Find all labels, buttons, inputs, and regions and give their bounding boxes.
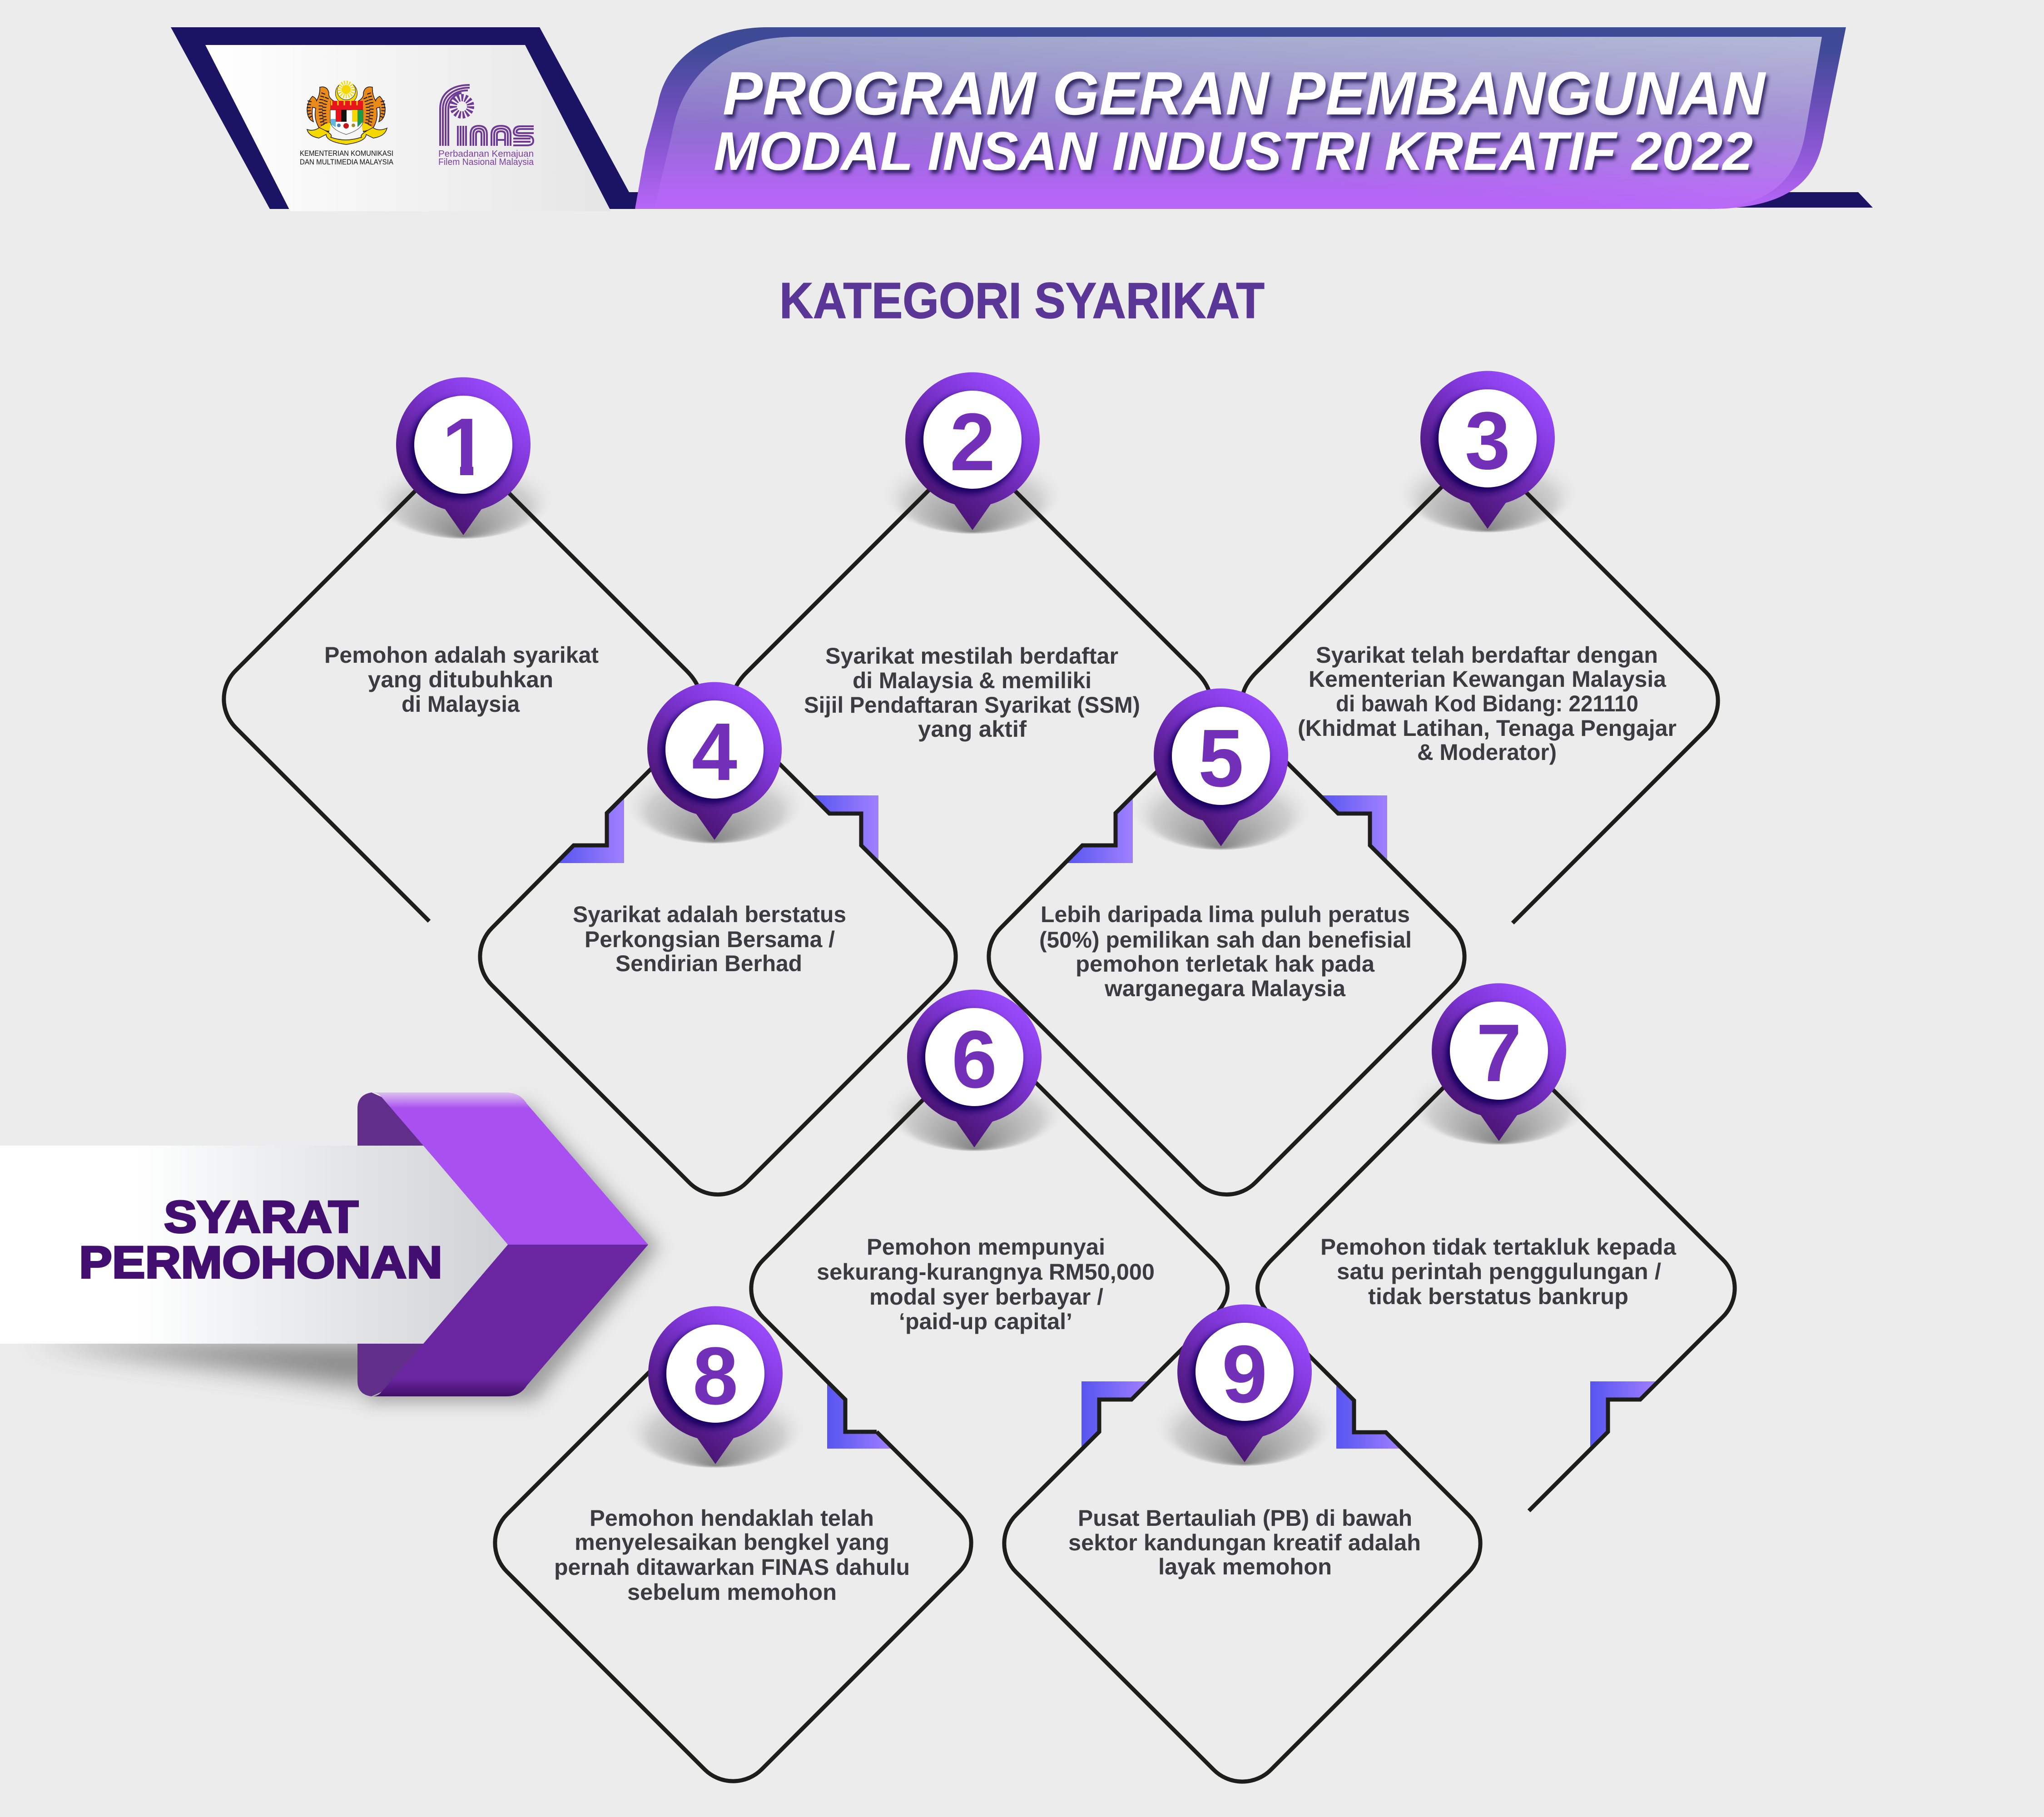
logo: Malaysian coat of arms [307, 83, 387, 144]
panel: criterion 4: Perkongsian Bersama / [585, 927, 835, 952]
panel: criterion 8: pernah ditawarkan FINAS dahulu [554, 1554, 910, 1580]
logo: FINAS mark [440, 85, 534, 146]
panel: criterion 7 [1257, 1034, 1735, 1511]
panel: criterion 2: Syarikat mestilah berdaftar [825, 643, 1118, 669]
panel: criterion 9: sektor kandungan kreatif adalah [1068, 1530, 1421, 1555]
logo caption: FINAS: Perbadanan Kemajuan [438, 149, 534, 159]
panel: criterion 2 [733, 447, 1210, 742]
pin 4 [647, 682, 782, 840]
panel: criterion 5: (50%) pemilikan sah dan benefisial [1039, 927, 1412, 953]
pin 1 [396, 377, 531, 535]
panel: criterion 7: tidak berstatus bankrup [1368, 1284, 1628, 1309]
panel: criterion 7: Pemohon tidak tertakluk kepada [1320, 1234, 1677, 1260]
panel: criterion 2: yang aktif [918, 716, 1027, 742]
pin 3: 3 [1465, 395, 1510, 487]
pin 1: 1 [442, 402, 487, 493]
heading: Kategori Syarikat: KATEGORI SYARIKAT [779, 273, 1265, 329]
panel: criterion 6: sekurang-kurangnya RM50,000 [817, 1259, 1155, 1285]
logo caption: ministry [300, 149, 394, 166]
panel: criterion 8: sebelum memohon [627, 1579, 837, 1605]
panel: criterion 8: menyelesaikan bengkel yang [575, 1529, 889, 1555]
panel: criterion 3: di bawah Kod Bidang: 221110 [1336, 691, 1638, 716]
pin 5 [1154, 689, 1288, 846]
pin 7 [1432, 983, 1566, 1141]
banner label: SYARAT [164, 1191, 358, 1242]
pin 7: 7 [1476, 1008, 1522, 1099]
panel: criterion 6: ‘paid-up capital’ [899, 1309, 1072, 1334]
header: logo panel [171, 27, 647, 211]
panel: criterion 4: Syarikat adalah berstatus [573, 902, 846, 927]
panel: criterion 8: Pemohon hendaklah telah [590, 1505, 874, 1531]
banner label: PERMOHONAN [79, 1237, 442, 1287]
panel: criterion 6: Pemohon mempunyai [867, 1234, 1105, 1260]
title: PROGRAM GERAN PEMBANGUNAN [723, 59, 1766, 128]
panel: criterion 3: (Khidmat Latihan, Tenaga Pengajar [1298, 715, 1677, 741]
panel: criterion 5 [989, 702, 1464, 1195]
title: MODAL INSAN INDUSTRI KREATIF 2022 [714, 121, 1753, 182]
pin 8 [648, 1306, 783, 1464]
panel: criterion 3: Syarikat telah berdaftar dengan [1316, 642, 1658, 668]
panel: criterion 9 [1004, 1332, 1480, 1782]
title [714, 59, 1766, 182]
panel: criterion 1 [224, 445, 700, 921]
panel: criterion 6: modal syer berbayar / [869, 1284, 1103, 1310]
panel: criterion 9: Pusat Bertauliah (PB) di bawah [1078, 1505, 1412, 1531]
panel: criterion 4: Sendirian Berhad [615, 951, 802, 976]
banner label [79, 1191, 442, 1287]
panel: criterion 8 [495, 1358, 971, 1781]
panel: criterion 3: Kementerian Kewangan Malaysia [1309, 666, 1667, 692]
panel: criterion 4 [480, 702, 956, 1195]
panel: criterion 9: layak memohon [1158, 1554, 1332, 1579]
panel: criterion 2: Sijil Pendaftaran Syarikat (SSM) [804, 692, 1140, 718]
panel: criterion 3: & Moderator) [1417, 740, 1557, 765]
panel: criterion 5: warganegara Malaysia [1104, 976, 1346, 1001]
pin 2 [905, 372, 1040, 530]
panel: criterion 5: Lebih daripada lima puluh peratus [1041, 902, 1410, 927]
logo caption: ministry: DAN MULTIMEDIA MALAYSIA [300, 158, 394, 166]
logo caption: ministry: KEMENTERIAN KOMUNIKASI [300, 149, 393, 158]
logo caption: FINAS [438, 149, 534, 167]
logo caption: FINAS: Filem Nasional Malaysia [438, 157, 534, 167]
pin 2: 2 [950, 397, 995, 488]
pin 9: 9 [1222, 1329, 1267, 1420]
panel: criterion 1: di Malaysia [402, 691, 520, 717]
pin 6: 6 [952, 1014, 997, 1105]
pin 3 [1420, 371, 1555, 529]
panel: criterion 7: satu perintah penggulungan / [1337, 1259, 1661, 1284]
pin 6 [907, 990, 1042, 1147]
panel: criterion 1: yang ditubuhkan [368, 667, 553, 692]
pin 8: 8 [693, 1330, 738, 1422]
panel: criterion 6 [751, 1035, 1228, 1449]
pin drop shadows [370, 448, 1592, 1468]
panel: criterion 5: pemohon terletak hak pada [1076, 951, 1375, 977]
panel: criterion 2: di Malaysia & memiliki [853, 668, 1091, 693]
pin 4: 4 [692, 706, 737, 798]
pin 9 [1177, 1305, 1312, 1462]
panel: criterion 1: Pemohon adalah syarikat [324, 642, 599, 668]
header: purple title banner [635, 27, 1873, 209]
panel: criterion 3 [1243, 447, 1718, 923]
banner: Syarat Permohonan arrow [0, 1092, 659, 1401]
pin 5: 5 [1198, 713, 1244, 804]
